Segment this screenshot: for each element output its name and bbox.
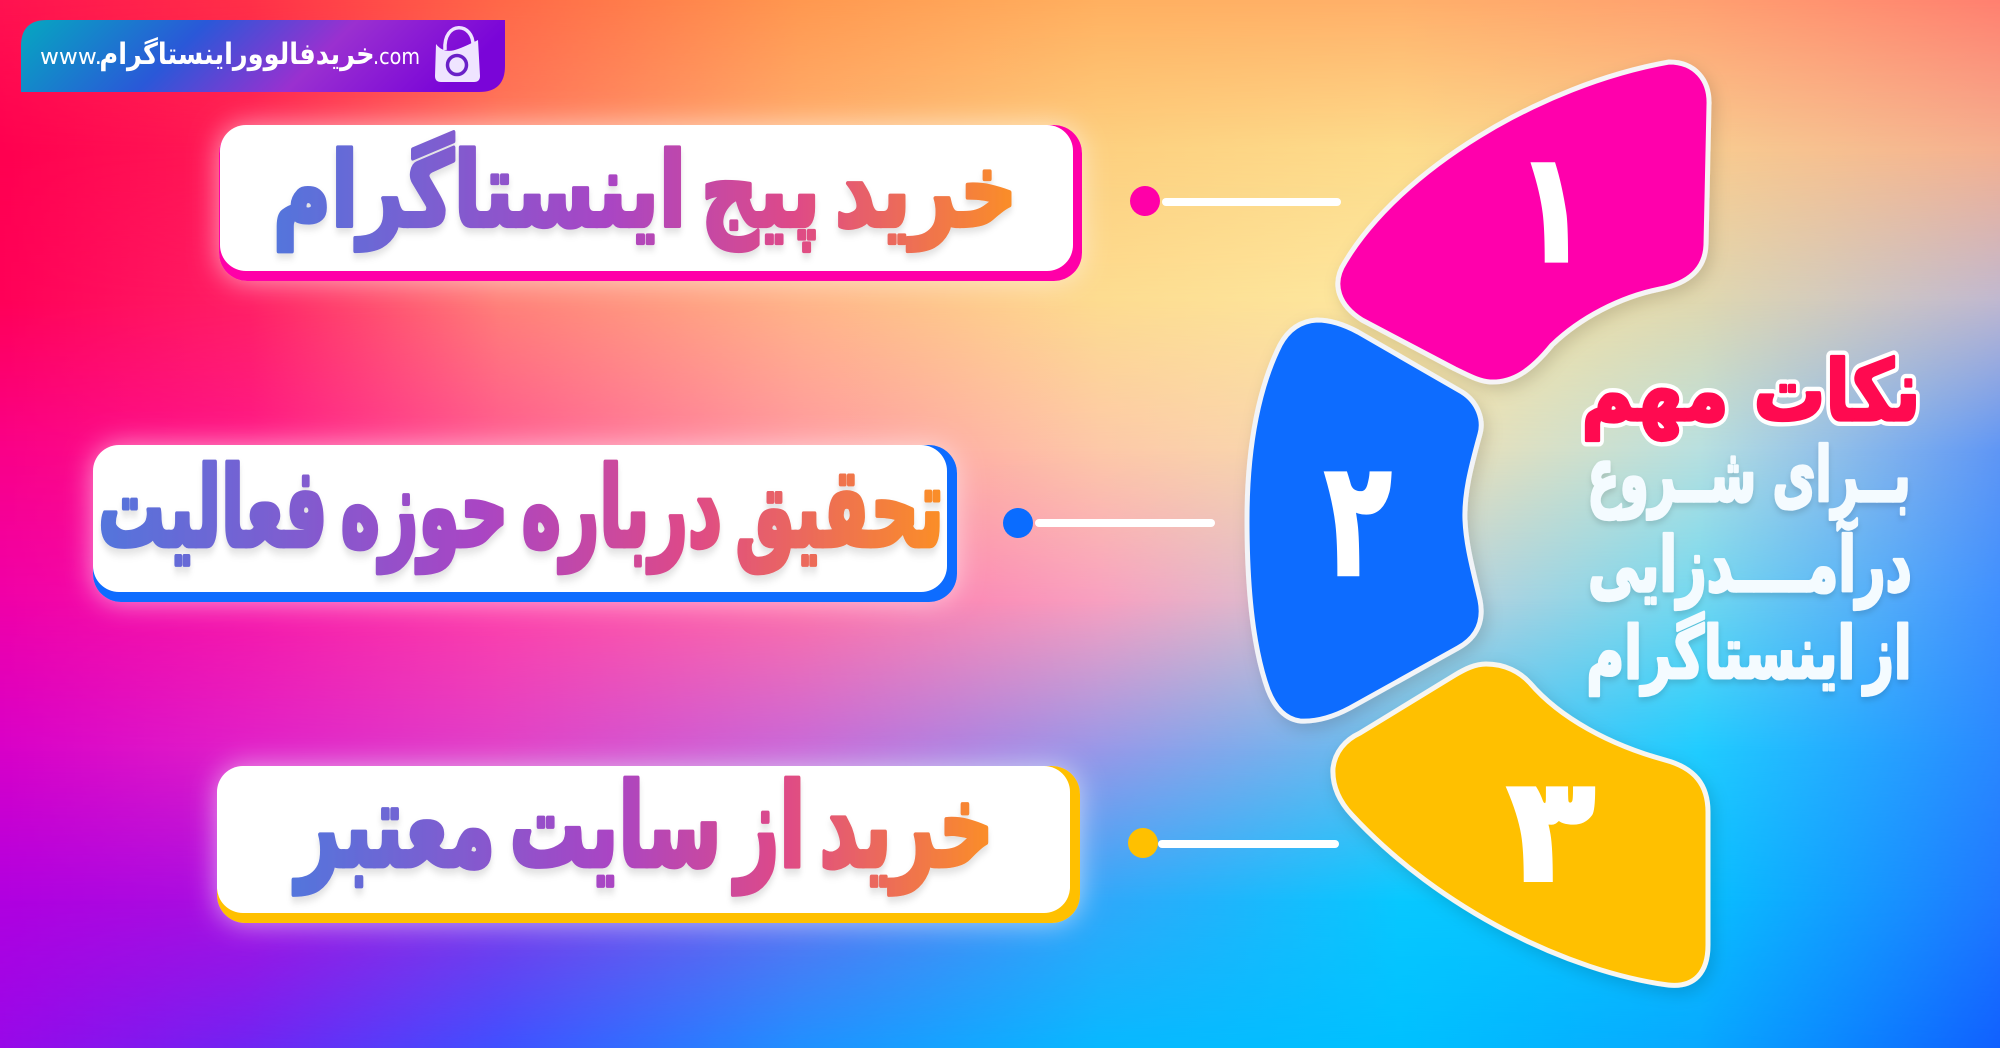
segment 3: yellow number: ۳ — [1507, 747, 1595, 915]
card 2: research the field: تحقیق درباره حوزه فعالیت — [98, 443, 944, 574]
card 1: buy instagram page — [219, 125, 1082, 281]
badge: website address: www. — [40, 45, 102, 70]
title: important tips: نکات مهم — [1581, 344, 1921, 440]
card 3: buy from trusted site: خرید از سایت معتبر — [292, 759, 994, 894]
card 3: buy from trusted site — [217, 759, 1080, 923]
segment 1: pink number: ۱ — [1518, 122, 1586, 296]
badge: website address: .com — [373, 45, 420, 70]
connector 2 — [1003, 508, 1215, 538]
subtitle: for starting to earn from instagram: درآمــــدزایی — [1588, 519, 1912, 610]
title: important tips: نکات مهم — [1581, 344, 1921, 440]
connector 3 — [1128, 828, 1339, 858]
segment 2: blue number: ۲ — [1325, 429, 1391, 612]
segment 1: pink number — [1338, 62, 1709, 382]
badge: website address — [21, 20, 505, 92]
segment 3: yellow number — [1333, 664, 1708, 985]
subtitle: for starting to earn from instagram: از اینستاگرام — [1586, 611, 1912, 696]
segment 2: blue number — [1247, 320, 1481, 721]
badge: website address: خریدفالووراینستاگرام — [99, 36, 375, 71]
icon: shopping bag with camera — [435, 28, 480, 82]
card 1: buy instagram page: خرید پیج اینستاگرام — [273, 131, 1017, 252]
connector 1 — [1130, 186, 1341, 216]
subtitle: for starting to earn from instagram — [1586, 431, 1912, 696]
subtitle: for starting to earn from instagram: بــرای شــروع — [1587, 431, 1911, 520]
